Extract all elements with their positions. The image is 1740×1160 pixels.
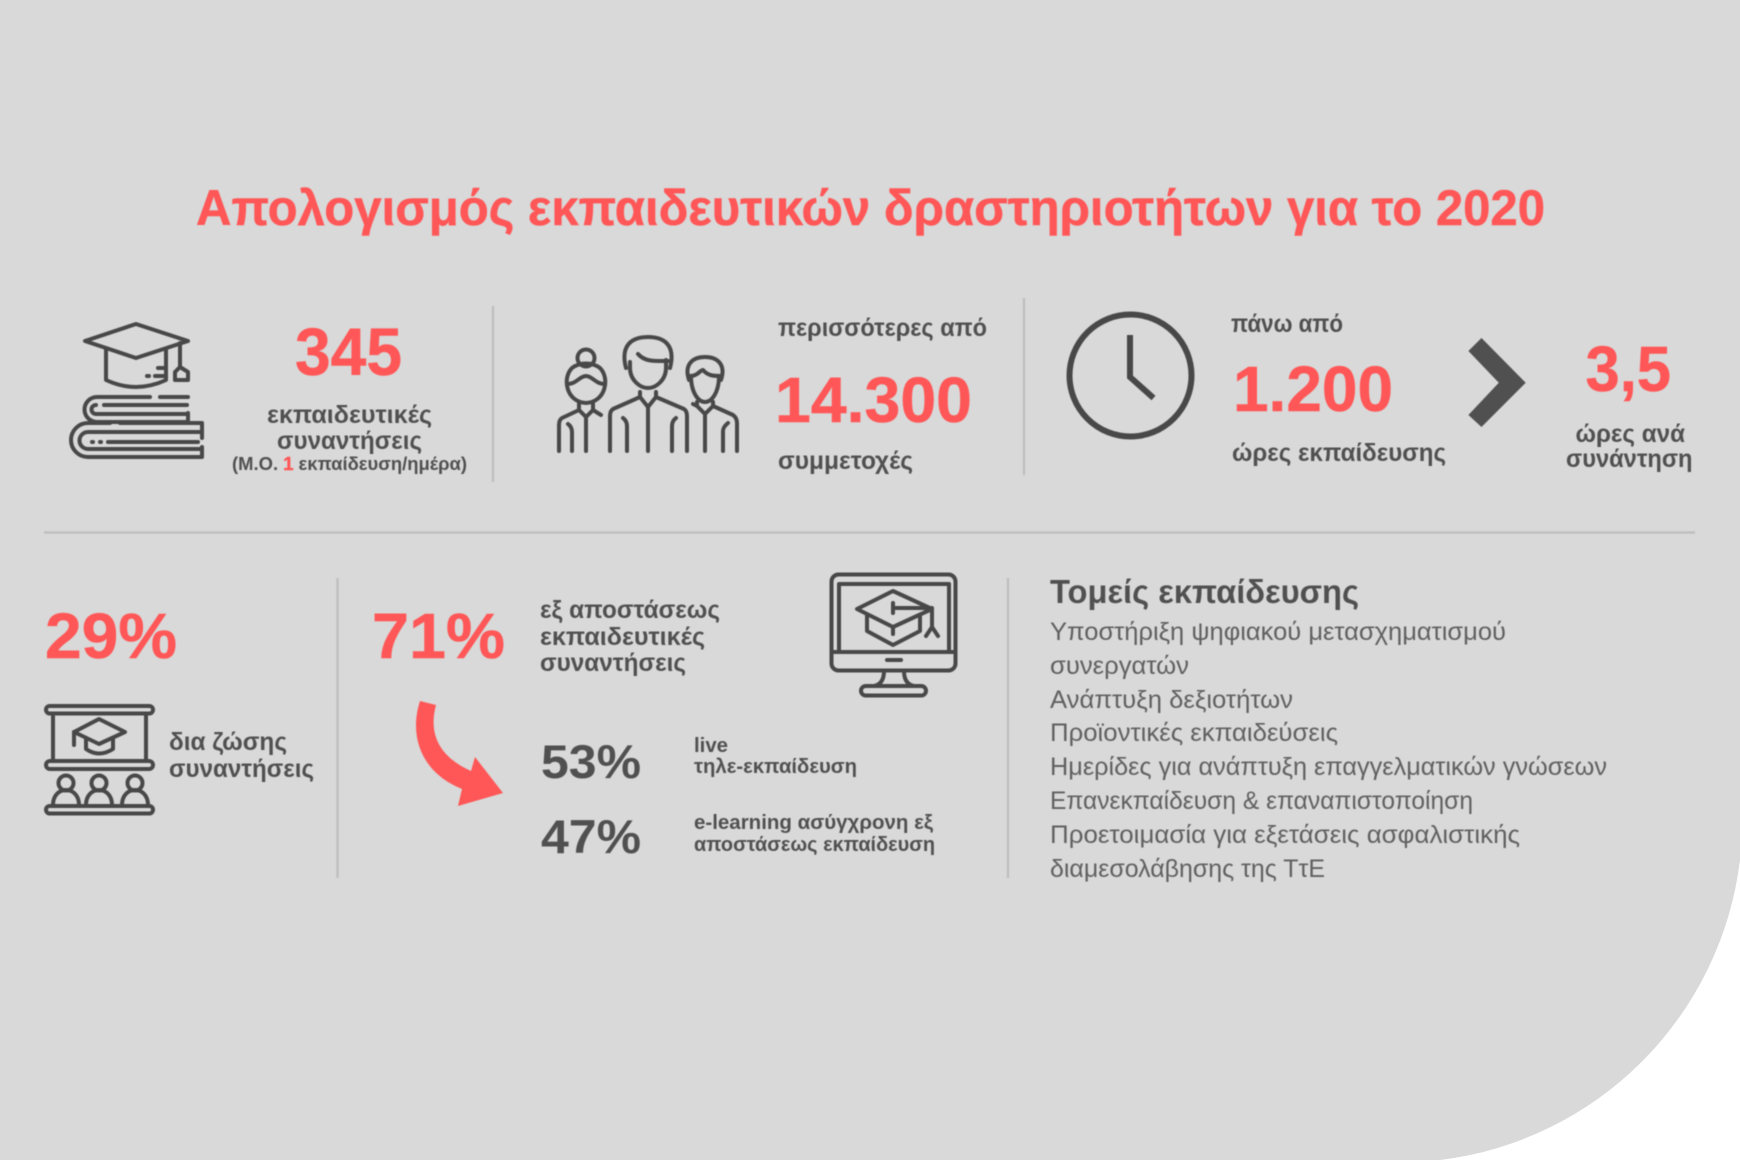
text: in-person meetings: [169, 728, 314, 783]
icon: monitor with cap: [832, 574, 956, 696]
text: in-person meetings: δια ζώσης: [169, 728, 287, 756]
text: distance meetings: [540, 596, 720, 677]
number: 14.300: 14.300: [775, 364, 972, 436]
panel: training hours: [1070, 310, 1692, 473]
list: training areas: Προετοιμασία για εξετάσεις ασφαλιστικής: [1050, 821, 1520, 849]
panel: distance meetings: [372, 574, 956, 863]
label: training meetings: συναντήσεις: [277, 427, 422, 455]
list: training areas: Ανάπτυξη δεξιοτήτων: [1050, 686, 1293, 714]
text: participations: συμμετοχές: [778, 447, 913, 475]
text: in-person meetings: συναντήσεις: [169, 755, 314, 783]
list: training areas: Επανεκπαίδευση & επαναπιστοποίηση: [1050, 787, 1473, 815]
title: Απολογισμός εκπαιδευτικών δραστηριοτήτων για το 2020: [196, 180, 1545, 236]
text: hours per meeting: συνάντηση: [1566, 445, 1692, 473]
icon: clock: [1070, 314, 1192, 436]
text: hours per meeting: ώρες ανά: [1576, 420, 1686, 448]
text: more than: περισσότερες από: [778, 314, 987, 342]
label: training meetings: εκπαιδευτικές: [267, 401, 432, 429]
stat: live e-training: 53%: [541, 735, 641, 788]
text: distance meetings: εξ αποστάσεως: [540, 596, 720, 624]
text: training hours: ώρες εκπαίδευσης: [1232, 439, 1446, 467]
number: 71%: 71%: [372, 600, 505, 672]
stat: e-learning: 47%: [541, 810, 641, 863]
label: training meetings: [232, 401, 467, 474]
icon: graduation cap on books: [71, 324, 202, 457]
text: hours per meeting: [1566, 420, 1692, 473]
arrow: curved down-right: [416, 701, 503, 806]
icon: classroom: [46, 706, 153, 814]
stat: live e-training: [541, 734, 857, 788]
icon: three people: [559, 337, 737, 451]
number: 345: 345: [295, 315, 402, 390]
list: training areas: Προϊοντικές εκπαιδεύσεις: [1050, 719, 1338, 747]
heading: training areas: Τομείς εκπαίδευσης: [1050, 573, 1359, 610]
list: training areas: Υποστήριξη ψηφιακού μετασχηματισμού: [1050, 618, 1506, 646]
stat: e-learning: [541, 810, 935, 863]
list: training areas: διαμεσολάβησης της ΤτΕ: [1050, 855, 1325, 883]
stat: e-learning: αποστάσεως εκπαίδευση: [694, 833, 935, 856]
number: 1.200: 1.200: [1233, 353, 1393, 425]
panel: participations: [559, 314, 987, 475]
label: training meetings: (Μ.Ο. 1 εκπαίδευση/ημέρα): [232, 453, 467, 474]
infographic content: [44, 180, 1695, 883]
stat: live e-training: live: [694, 734, 728, 757]
stat: live e-training: τηλε-εκπαίδευση: [694, 755, 857, 778]
text: distance meetings: εκπαιδευτικές: [540, 623, 705, 651]
list: training areas: Ημερίδες για ανάπτυξη επαγγελματικών γνώσεων: [1050, 753, 1607, 781]
list: training areas: συνεργατών: [1050, 652, 1189, 680]
text: distance meetings: συναντήσεις: [540, 649, 686, 677]
stat: e-learning: e-learning ασύγχρονη εξ: [694, 811, 934, 834]
number: 29%: 29%: [45, 600, 177, 672]
panel: training meetings: [71, 315, 467, 474]
text: over: πάνω από: [1231, 310, 1343, 338]
arrow: chevron: [1468, 338, 1526, 427]
panel: in-person meetings: [45, 600, 314, 814]
list: training areas: [1050, 618, 1607, 883]
number: 3,5: 3,5: [1586, 333, 1671, 405]
panel: training areas: [1050, 573, 1607, 883]
